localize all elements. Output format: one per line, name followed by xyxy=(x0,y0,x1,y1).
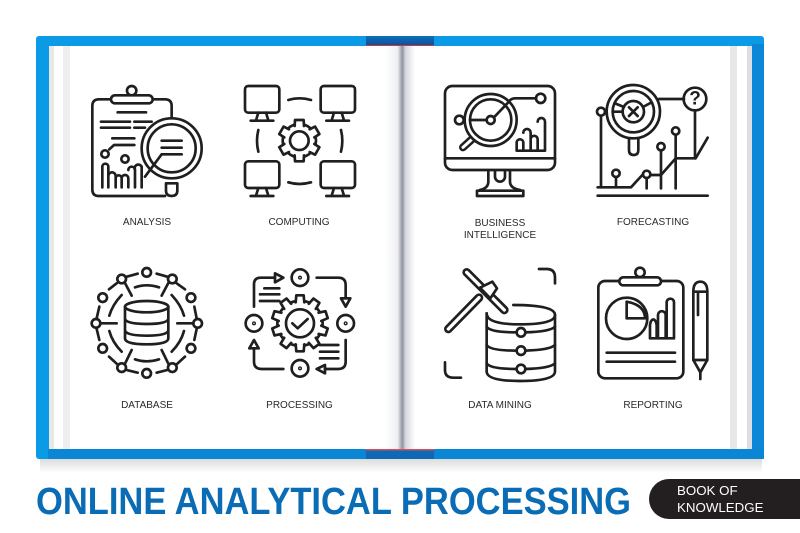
pages xyxy=(49,46,752,449)
label: analysis: ANALYSIS xyxy=(123,217,171,228)
badge: book of knowledge xyxy=(649,479,800,519)
label: reporting: REPORTING xyxy=(623,400,683,411)
title: ONLINE ANALYTICAL PROCESSING xyxy=(36,481,631,523)
icon: business intelligence xyxy=(445,86,555,196)
book gutter xyxy=(385,46,415,449)
badge: book of knowledge: KNOWLEDGE xyxy=(677,500,764,515)
label: data mining: DATA MINING xyxy=(468,400,532,411)
book cover xyxy=(36,36,764,459)
icon: forecasting xyxy=(597,85,708,196)
spine bottom xyxy=(366,449,434,459)
label: business intelligence: INTELLIGENCE xyxy=(464,230,536,241)
icon: data mining xyxy=(445,269,555,381)
icon: database xyxy=(92,268,202,378)
book xyxy=(36,36,764,473)
label: database: DATABASE xyxy=(121,400,173,411)
label: computing: COMPUTING xyxy=(268,217,330,228)
icon text: question mark: ? xyxy=(689,88,701,110)
spine top xyxy=(366,36,434,46)
icon: processing xyxy=(246,269,354,377)
label: processing: PROCESSING xyxy=(266,400,333,411)
badge: book of knowledge: BOOK OF xyxy=(677,483,738,498)
icon: computing xyxy=(245,86,355,196)
label: forecasting: FORECASTING xyxy=(617,217,689,228)
icon: reporting xyxy=(598,268,707,379)
label: business intelligence: BUSINESS xyxy=(475,218,525,229)
icon: analysis xyxy=(92,86,202,196)
